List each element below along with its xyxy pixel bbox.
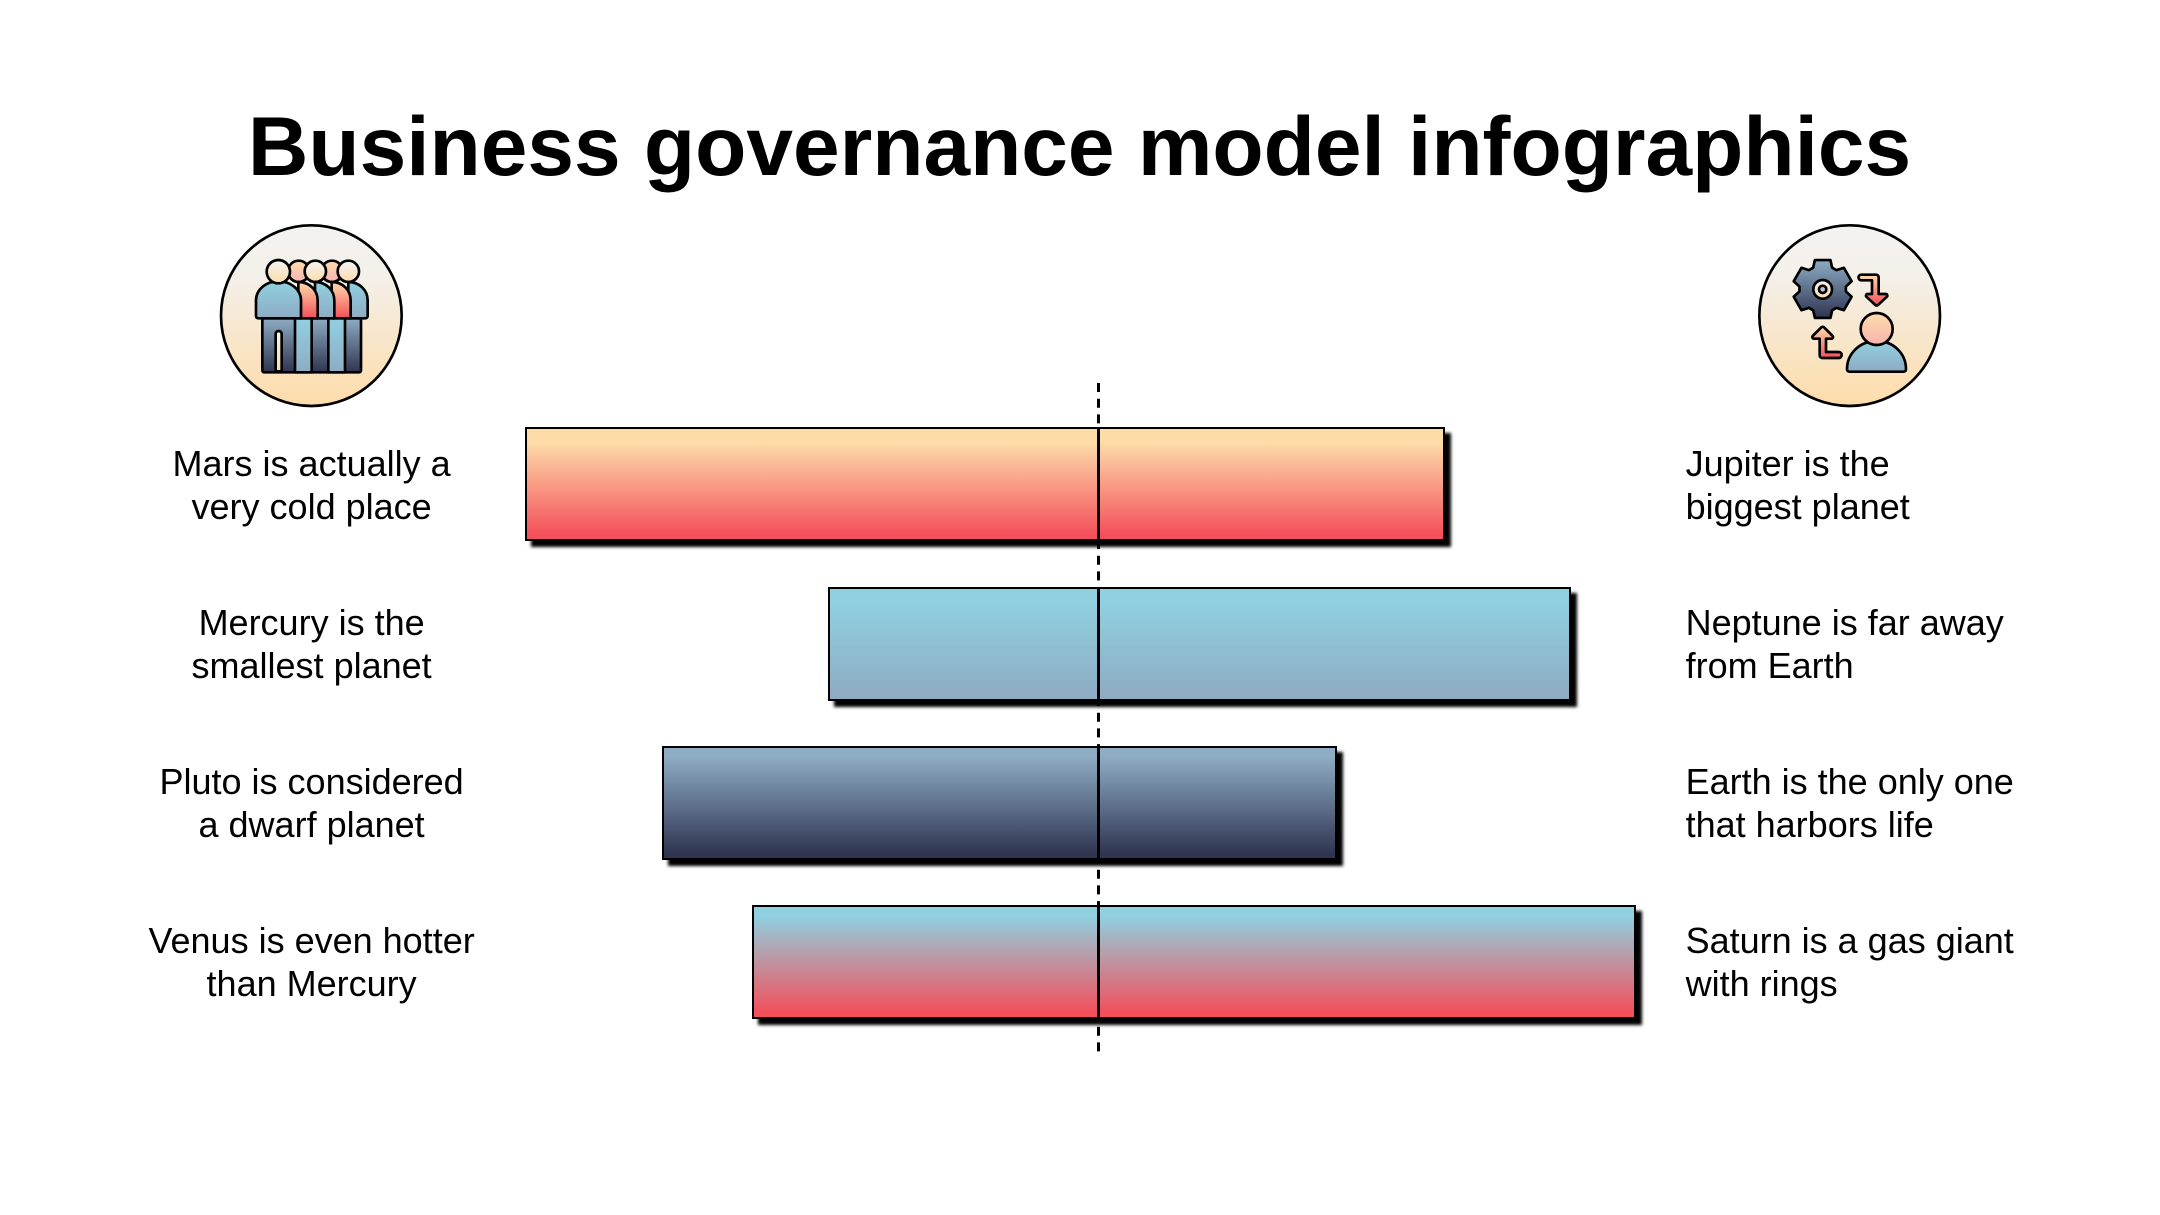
right label: Earth (1686, 761, 2014, 845)
left label: Venus (148, 920, 475, 1004)
title: Business governance model infographics (248, 99, 1911, 193)
left label: Venus: than Mercury (207, 963, 417, 1004)
right label: Jupiter (1686, 443, 1910, 527)
rear heads (288, 261, 359, 282)
right label: Neptune: from Earth (1686, 645, 1854, 686)
right label: Jupiter: Jupiter is the (1686, 443, 1890, 484)
arrow up to gear (1812, 327, 1842, 358)
left label: Pluto: a dwarf planet (199, 804, 425, 845)
right label: Jupiter: biggest planet (1686, 486, 1910, 527)
icon: group of people (220, 224, 403, 408)
right label: Earth: that harbors life (1686, 804, 1934, 845)
left label: Mars: very cold place (192, 486, 432, 527)
right label: Saturn (1686, 920, 2014, 1004)
right label: Neptune: Neptune is far away (1686, 602, 2004, 643)
bar: Venus and Saturn (752, 905, 1636, 1019)
right label: Saturn: Saturn is a gas giant (1686, 920, 2014, 961)
bar: Pluto and Earth (662, 746, 1337, 860)
right label: Saturn: with rings (1686, 963, 1838, 1004)
left label: Mars (173, 443, 451, 527)
dashed center axis (1097, 383, 1100, 1052)
right label: Neptune (1686, 602, 2004, 686)
left label: Mercury: Mercury is the (199, 602, 425, 643)
left label: Mercury: smallest planet (192, 645, 432, 686)
gear (1794, 260, 1852, 318)
left label: Venus: Venus is even hotter (148, 920, 475, 961)
bar: Mercury and Neptune (828, 586, 1571, 700)
left label: Pluto: Pluto is considered (160, 761, 464, 802)
background circle (1759, 225, 1940, 406)
bodies (256, 281, 368, 318)
background circle (221, 225, 402, 406)
legs (262, 318, 361, 372)
left label: Mercury (192, 602, 432, 686)
arrow down to person (1858, 275, 1887, 306)
left label: Pluto (160, 761, 464, 845)
icon: gear and person cycle (1758, 224, 1942, 408)
right label: Earth: Earth is the only one (1686, 761, 2014, 802)
bar: Mars and Jupiter (525, 427, 1445, 541)
left label: Mars: Mars is actually a (173, 443, 451, 484)
front head (267, 260, 290, 283)
person (1847, 313, 1906, 372)
